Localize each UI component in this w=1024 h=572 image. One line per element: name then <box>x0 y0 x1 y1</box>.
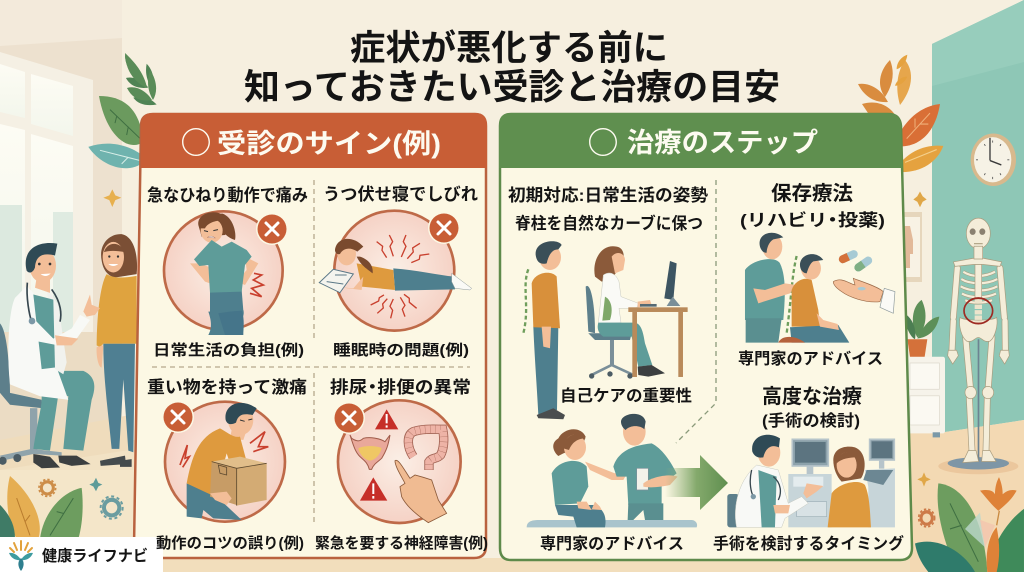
divider lines <box>676 180 716 443</box>
badge: X <box>428 212 460 244</box>
decorative leaves between title and panels <box>125 53 911 116</box>
panel header <box>141 113 487 168</box>
doctor hand <box>55 295 100 345</box>
wall clock <box>971 134 1016 186</box>
logo icon <box>9 541 33 571</box>
label: sleep problem: 睡眠時の問題(例) <box>333 342 469 359</box>
arrow <box>665 455 728 510</box>
label: conservative therapy: 保存療法 <box>771 182 853 205</box>
stethoscope <box>27 283 61 322</box>
illustration: man lifting box <box>165 402 285 522</box>
heading: medical signs: 受診のサイン(例) <box>217 129 441 159</box>
illustration: counselling pair <box>527 414 697 527</box>
doctor coat <box>8 286 68 400</box>
panel body <box>500 114 912 560</box>
capsules <box>838 249 859 265</box>
chair <box>586 286 595 333</box>
potted plant and cabinet <box>905 300 945 437</box>
illustration: standing man and desk posture <box>523 241 688 419</box>
panel header <box>499 113 902 168</box>
label: advanced treatment: 高度な治療 <box>762 385 862 408</box>
label: surgery timing: 手術を検討するタイミング <box>713 534 904 553</box>
panel: medical signs <box>134 113 488 558</box>
label: keep spine curved: 脊柱を自然なカーブに保つ <box>515 213 703 233</box>
label: daily burden: 日常生活の負担(例) <box>153 341 304 359</box>
title <box>244 29 780 107</box>
panel: treatment steps <box>499 113 912 560</box>
label: specialist advice, bottom: 専門家のアドバイス <box>540 534 684 553</box>
skeleton model <box>938 218 1018 474</box>
label: rehab and medication: (リハビリ ・投薬) <box>740 210 885 230</box>
woman <box>594 246 624 282</box>
doctor and patient, left scene <box>0 234 137 468</box>
divider lines <box>152 180 470 522</box>
patient woman <box>97 234 137 467</box>
monitor <box>664 261 677 300</box>
chair <box>0 323 62 465</box>
illustration: doctor and patient with equipment <box>727 435 895 527</box>
illustration: prone woman <box>319 211 472 331</box>
badge: X <box>162 401 194 433</box>
decorative plants bottom right <box>915 472 1024 572</box>
illustration: organs and warnings <box>338 400 461 523</box>
decorative orange leaves, right <box>893 55 943 207</box>
label: initial response: 初期対応:日常生活の姿勢 <box>508 186 708 205</box>
label: specialist advice, top: 専門家のアドバイス <box>738 349 883 368</box>
badge: X <box>256 213 288 245</box>
label: emergency neuro disorder: 緊急を要する神経障害(例) <box>315 534 488 552</box>
skeleton limbs outline <box>952 268 1005 451</box>
doctor head <box>35 278 50 293</box>
illustration: therapist and pills <box>745 233 895 343</box>
hand with pills <box>833 278 883 302</box>
panel body <box>134 114 486 558</box>
desk <box>628 307 688 312</box>
header icon circle: ○ <box>180 118 212 163</box>
decorative leaves top left <box>88 55 157 207</box>
logo text: 健康ライフナビ <box>42 546 148 565</box>
label: self care: 自己ケアの重要性 <box>560 386 692 405</box>
label: motion mistake: 動作のコツの誤り(例) <box>156 535 304 552</box>
label: urinary and bowel abnormality: 排尿・排便の異常 <box>330 378 471 397</box>
wall picture <box>900 212 922 282</box>
label: heavy lifting pain: 重い物を持って激痛 <box>147 377 307 397</box>
badge: X <box>333 402 365 434</box>
doctor trousers <box>33 371 94 451</box>
title line 2: 知っておきたい受診と治療の目安 <box>244 67 780 107</box>
illustration: twisting woman <box>164 211 283 335</box>
label: surgery consideration: (手術の検討) <box>762 411 860 430</box>
label: prone numbness: うつ伏せ寝でしびれ <box>323 184 478 204</box>
heading: treatment steps: 治療のステップ <box>627 128 818 158</box>
logo badge <box>0 537 163 572</box>
label: twist pain: 急なひねり動作で痛み <box>147 185 308 205</box>
header icon circle: ○ <box>588 118 618 163</box>
shoes <box>33 454 91 468</box>
decorative plants bottom left <box>0 476 123 539</box>
title line 1: 症状が悪化する前に <box>350 29 668 68</box>
